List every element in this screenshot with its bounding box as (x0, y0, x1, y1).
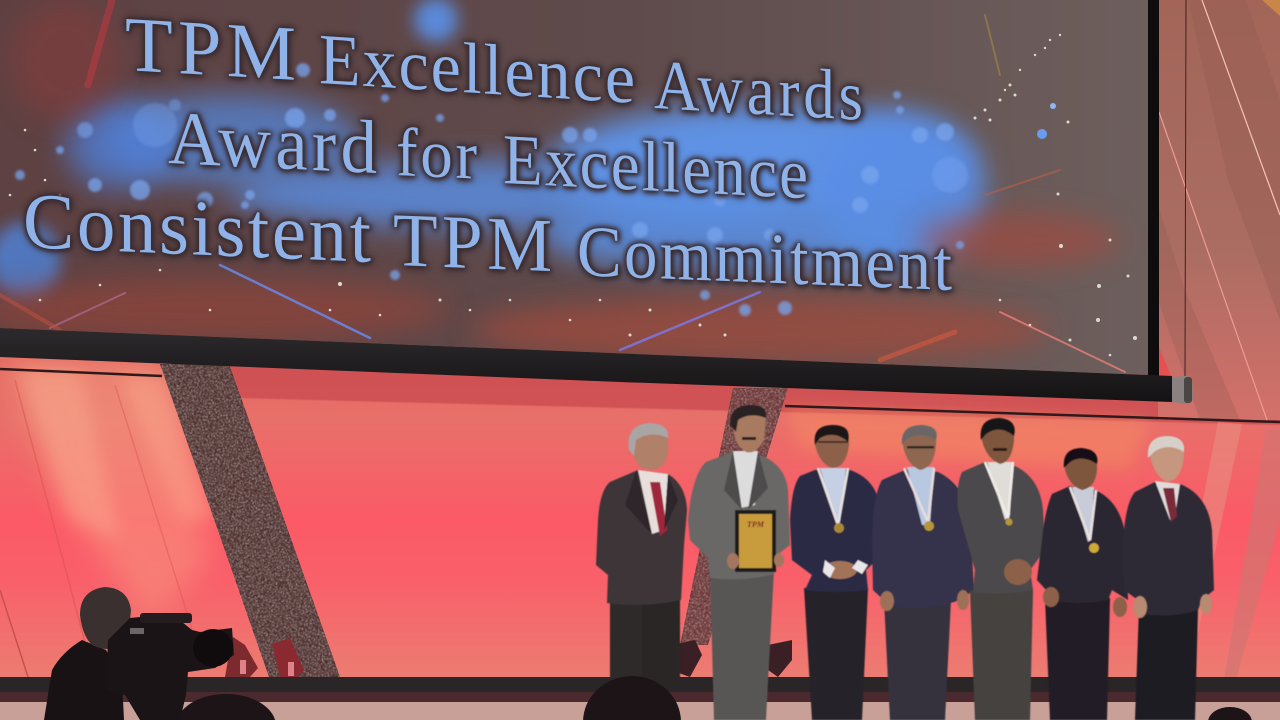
right-hand wall panels (1158, 0, 1280, 420)
screen title text (23, 0, 952, 307)
video camera (106, 613, 234, 720)
stage deck and floor (0, 677, 1280, 720)
title line 1 (125, 0, 863, 136)
title line 1: TPM (125, 0, 296, 97)
audience heads (176, 676, 1252, 720)
title line 2: Excellence (503, 119, 808, 214)
screen frame and roller (0, 0, 1193, 404)
screen nebula glow (0, 0, 1120, 364)
person 2: man in grey suit holding plaque (688, 405, 790, 720)
person 5: grey jacket with medal (958, 418, 1045, 720)
award recipients group (596, 405, 1214, 720)
title line 2 (168, 97, 808, 214)
person 3: navy suit with medal (790, 425, 882, 720)
stage lights (225, 637, 792, 677)
award plaque: TPM (747, 520, 765, 529)
title line 1: Excellence (319, 20, 635, 119)
person 6: dark suit with gold medal (1037, 448, 1128, 720)
title line 3: TPM (393, 199, 552, 288)
title line 1: Awards (654, 46, 863, 136)
award plaque (735, 510, 776, 572)
title line 3: Commitment (577, 212, 952, 307)
lower stage wall (0, 350, 1280, 690)
title line 3: Consistent (23, 176, 371, 279)
centre glitter pillar (680, 388, 788, 645)
title line 3 (23, 176, 952, 307)
screen particles (9, 34, 1137, 356)
person 4: navy suit with glasses and medal (872, 425, 974, 720)
left glitter pillar (160, 364, 340, 677)
projection screen (0, 0, 1148, 380)
rigging cables (0, 369, 1280, 422)
person 7: elderly man in dark suit (1123, 436, 1214, 720)
title line 2: Award (168, 97, 377, 190)
cameraman silhouette (44, 587, 131, 720)
screen light streaks (0, 0, 1125, 372)
person 1: grey-haired man in red tie (596, 423, 687, 685)
title line 2: for (396, 114, 477, 194)
